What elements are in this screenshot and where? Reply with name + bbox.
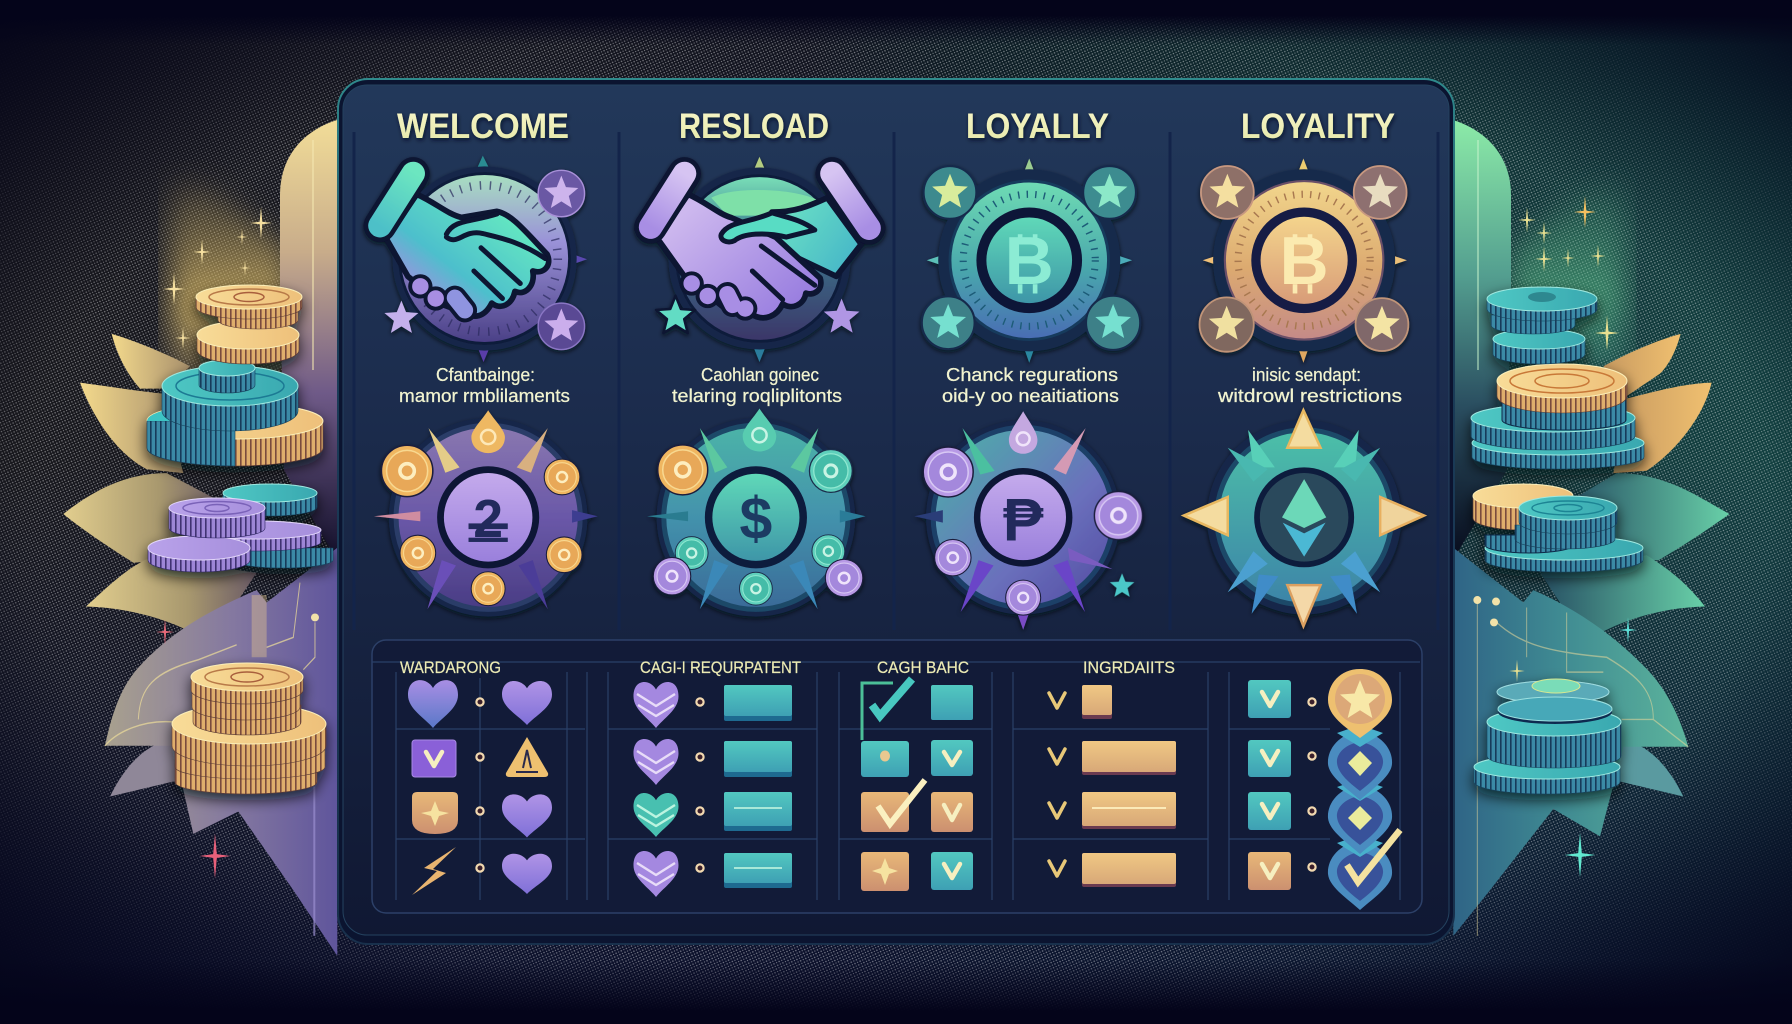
column 1 icons: hearts and badges	[408, 680, 552, 895]
left upper back panel	[280, 120, 337, 560]
table panel	[372, 640, 1422, 913]
table heading: CASH BACK: CAGH BAHC	[877, 658, 969, 677]
right decoration panel	[1453, 120, 1729, 936]
icon: welcome handshake	[380, 156, 587, 362]
reload description: Caohlan goinec	[701, 365, 819, 385]
column 5 icons: boxes and badge chain	[1248, 669, 1400, 910]
right lower panel with circuit lines	[1453, 548, 1688, 936]
icon: gold bitcoin medallion	[1200, 159, 1408, 363]
table heading: WARDARONG: WARDARONG	[400, 658, 501, 677]
heading: LOYALLY: LOYALLY	[966, 107, 1109, 146]
right upper back panel	[1453, 120, 1511, 560]
column 4 icons: checks and gold bars	[1049, 685, 1176, 887]
welcome description: Cfantbainge:	[436, 365, 535, 385]
right sparkles	[1509, 196, 1637, 877]
icon: purple wheel: 2	[473, 490, 503, 549]
table heading: CASH REQUIREMENTS: CAGI-I REQURPATENT	[640, 658, 801, 677]
column dividers	[354, 132, 1438, 630]
reload description: telaring roqliplitonts	[672, 386, 842, 406]
table heading: INGREDIENTS: INGRDAIITS	[1083, 658, 1175, 677]
left decoration panel	[63, 120, 337, 956]
welcome description	[399, 365, 570, 406]
icon: lavender wheel: ₱	[1003, 486, 1044, 554]
heading: LOYALITY: LOYALITY	[1241, 107, 1395, 146]
left coin stack 3: gold	[172, 663, 326, 794]
loyality description: witdrowl restrictions	[1217, 386, 1402, 406]
heading: RESLOAD: RESLOAD	[679, 107, 829, 146]
right glow	[1510, 180, 1625, 380]
left coin stack 2: purple and teal	[148, 484, 333, 572]
icon: teal wheel	[647, 408, 866, 617]
reload description	[672, 365, 842, 406]
right coin stack 2	[1473, 484, 1643, 572]
main panel	[338, 79, 1454, 944]
loyality description	[1217, 365, 1402, 406]
left sparkles	[156, 207, 272, 878]
left glow	[170, 180, 290, 380]
column 3 icons: check boxes	[861, 679, 973, 891]
icon: teal bitcoin medallion	[922, 159, 1140, 363]
icon: gold bitcoin medallion: B	[1280, 224, 1329, 299]
column 2 icons: chevron hearts and bars	[634, 682, 792, 897]
icon: teal bitcoin medallion: B	[1005, 224, 1054, 299]
left vertical light line	[312, 140, 314, 370]
icon: ethereum wheel	[1184, 410, 1424, 626]
right leaves	[1540, 334, 1729, 797]
icon: purple wheel	[374, 410, 598, 617]
left coin stack 1: gold and teal	[147, 285, 323, 466]
loyally description: Chanck regurations	[946, 365, 1118, 385]
loyally description: oid-y oo neaitiations	[942, 386, 1119, 406]
heading: WELCOME: WELCOME	[397, 107, 569, 146]
table grid	[372, 662, 1420, 900]
icon: teal wheel: $	[740, 487, 772, 552]
left leaves	[63, 334, 257, 797]
right coin stack 1	[1471, 287, 1644, 469]
left lower panel with circuit lines	[105, 548, 337, 956]
welcome description: mamor rmblilaments	[399, 386, 570, 406]
loyally description	[942, 365, 1119, 406]
loyality description: inisic sendapt:	[1252, 365, 1361, 385]
right coin stack 3	[1474, 679, 1621, 794]
right vertical light line	[1477, 140, 1479, 370]
icon: reload handshake	[651, 157, 869, 362]
icon: lavender wheel	[914, 411, 1143, 630]
